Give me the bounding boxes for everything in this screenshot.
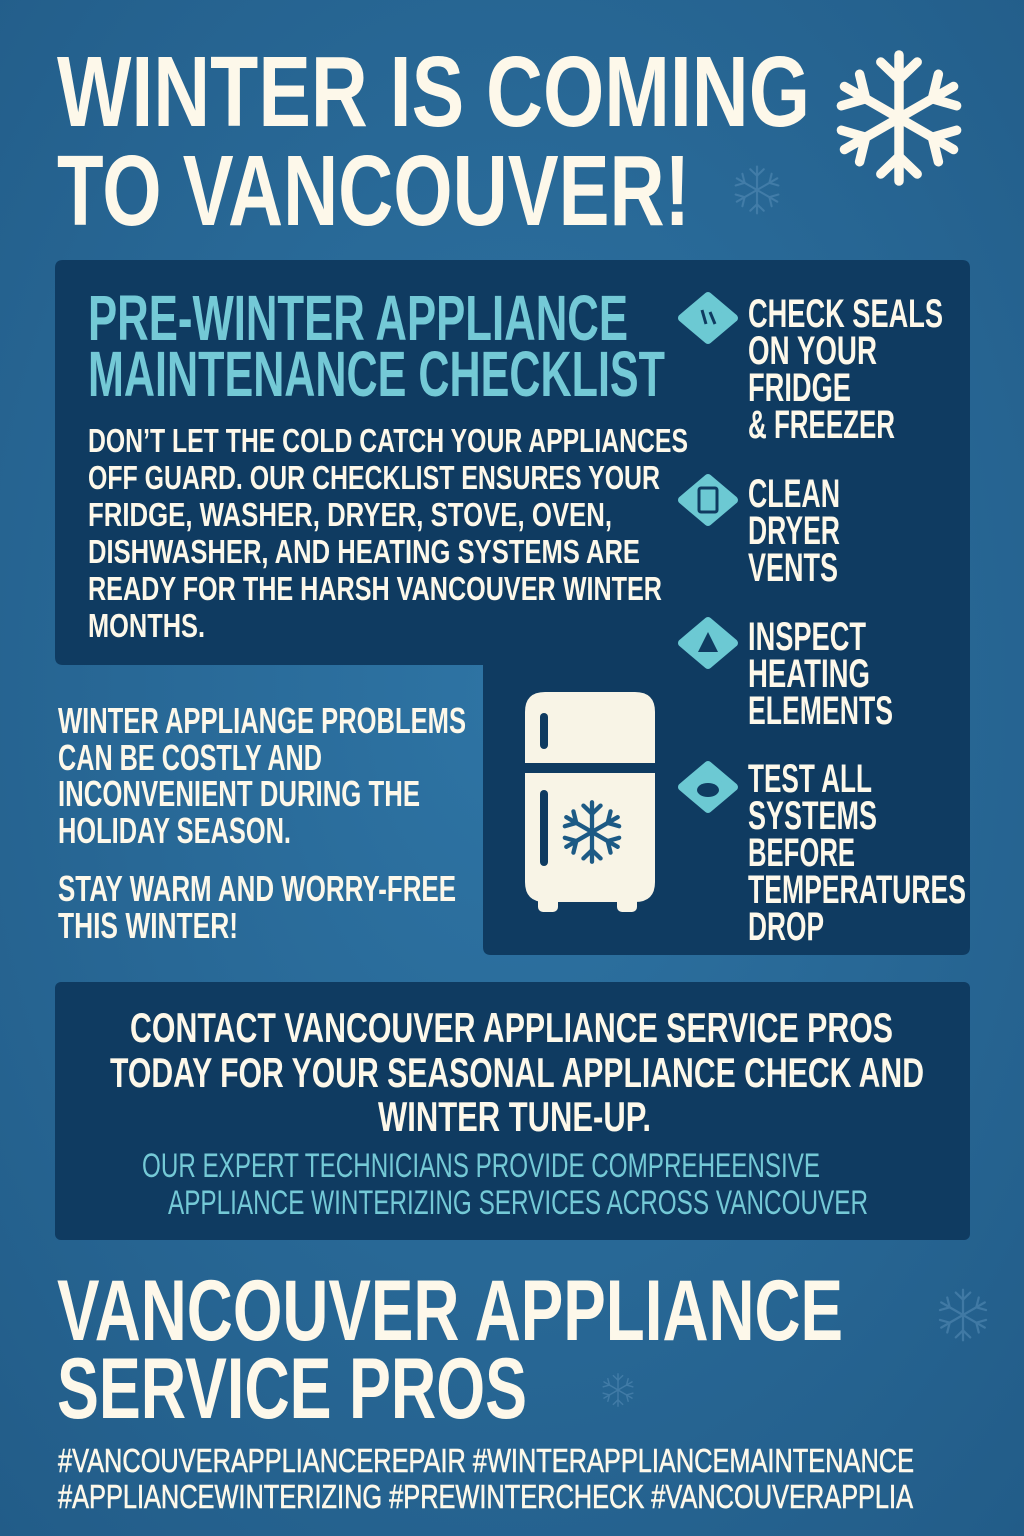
text block: intro: MONTHS. — [88, 607, 205, 644]
icon: dryer — [682, 478, 734, 522]
icon: fridge — [525, 692, 655, 912]
text block: intro: FRIDGE, WASHER, DRYER, STOVE, OVEN, — [88, 496, 612, 533]
item: check seals: ON YOUR — [748, 329, 877, 373]
text block: intro: READY FOR THE HARSH VANCOUVER WINTER — [88, 570, 662, 607]
text block: winter problems: HOLIDAY SEASON. — [58, 810, 291, 851]
title: TO VANCOUVER! — [57, 135, 690, 247]
checklist items — [682, 292, 966, 949]
title — [57, 36, 810, 247]
item: test systems: BEFORE — [748, 831, 855, 875]
icon: seals — [682, 296, 734, 340]
item: test systems: TEST ALL — [748, 757, 872, 801]
footer brand: SERVICE PROS — [57, 1341, 527, 1437]
heading: checklist: PRE-WINTER APPLIANCE — [88, 282, 628, 354]
item: dryer vents — [748, 472, 840, 590]
text block: winter problems: THIS WINTER! — [58, 905, 238, 946]
item: check seals: & FREEZER — [748, 403, 895, 447]
item: test systems: SYSTEMS — [748, 794, 877, 838]
heading: checklist — [88, 282, 665, 410]
panel: checklist — [55, 260, 970, 955]
footer brand — [57, 1263, 843, 1437]
text block: winter problems: STAY WARM AND WORRY-FREE — [58, 868, 456, 909]
item: dryer vents: DRYER — [748, 509, 840, 553]
item: dryer vents: CLEAN — [748, 472, 840, 516]
item: heating elements: HEATING — [748, 652, 870, 696]
item: heating elements: ELEMENTS — [748, 689, 893, 733]
panel: contact: WINTER TUNE-UP. — [378, 1093, 651, 1140]
icon: snowflake — [835, 55, 963, 181]
item: check seals: FRIDGE — [748, 366, 851, 410]
heading: checklist: MAINTENANCE CHECKLIST — [88, 338, 665, 410]
panel: contact — [55, 982, 970, 1240]
text block: intro: DISHWASHER, AND HEATING SYSTEMS ARE — [88, 533, 640, 570]
hashtags — [58, 1442, 914, 1515]
icon: test systems — [682, 765, 734, 809]
title: WINTER IS COMING — [57, 36, 810, 148]
text block: intro: OFF GUARD. OUR CHECKLIST ENSURES YOUR — [88, 459, 660, 496]
item: test systems — [748, 757, 966, 949]
text block: winter problems: INCONVENIENT DURING THE — [58, 773, 420, 814]
item: check seals — [748, 292, 943, 447]
text block: intro — [88, 422, 688, 644]
item: heating elements — [748, 615, 893, 733]
item: dryer vents: VENTS — [748, 546, 838, 590]
text block: winter problems: WINTER APPLIANGE PROBLEMS — [58, 700, 466, 741]
item: heating elements: INSPECT — [748, 615, 866, 659]
icon: heating — [682, 621, 734, 665]
text block: winter problems — [58, 700, 466, 946]
item: test systems: DROP — [748, 905, 824, 949]
text block: winter problems: CAN BE COSTLY AND — [58, 737, 322, 778]
text block: intro: DON’T LET THE COLD CATCH YOUR APPLIANCES — [88, 422, 688, 459]
